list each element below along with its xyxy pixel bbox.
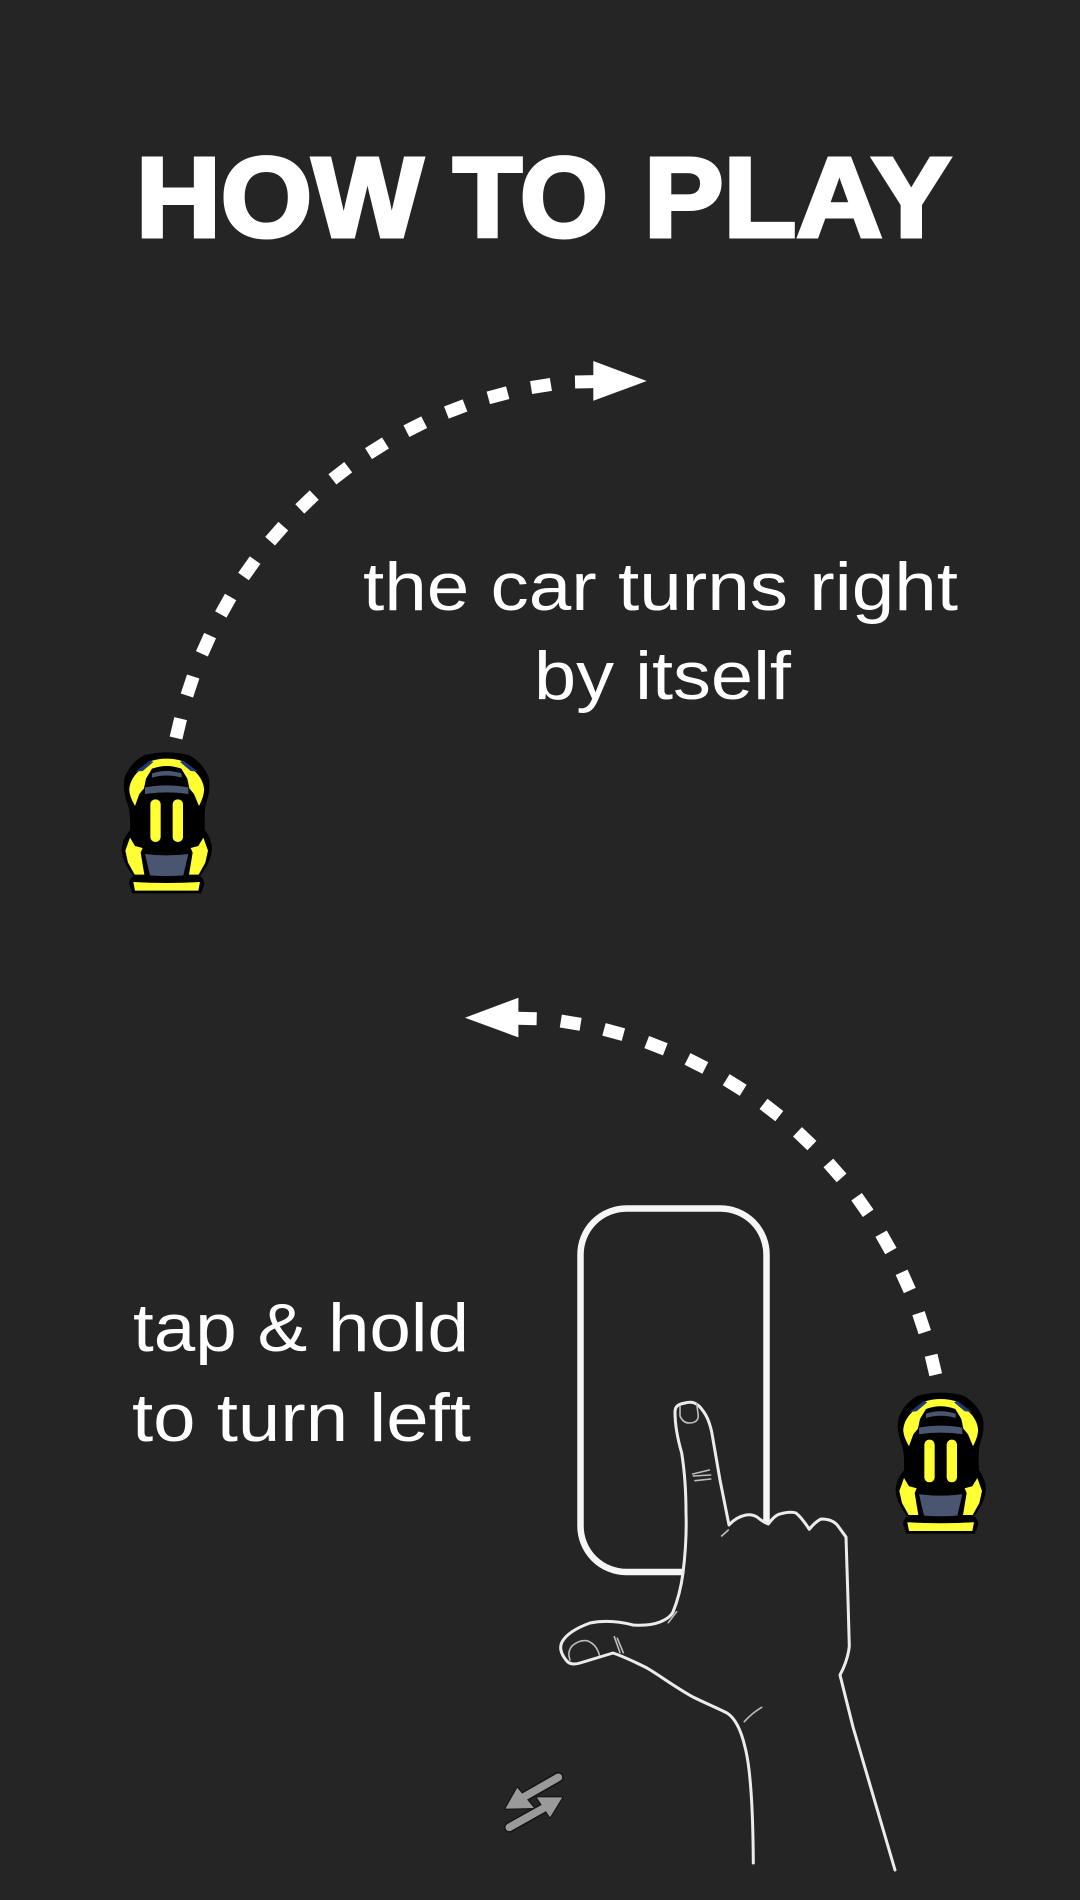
icon: hand pressing the screen xyxy=(561,1402,895,1870)
title: TO xyxy=(453,134,608,260)
title: PLAY xyxy=(644,134,951,260)
car: rear wings and bumper xyxy=(899,1478,982,1531)
car: navy corners xyxy=(909,1401,972,1412)
text: the car turns right by itself: by itself xyxy=(534,638,791,714)
car: yellow stripes xyxy=(150,799,183,842)
hand outline xyxy=(561,1402,895,1870)
title: HOW xyxy=(136,134,423,260)
car: yellow front wing xyxy=(129,759,204,806)
hand details: nails and creases xyxy=(569,1404,762,1722)
car: rear wings and bumper xyxy=(125,838,208,891)
text: the car turns right by itself xyxy=(363,549,958,714)
icon: yellow car, right xyxy=(896,1393,986,1534)
car: navy corners xyxy=(135,761,198,772)
arrow: dashed curve turning right xyxy=(176,361,647,738)
title xyxy=(136,134,951,260)
icon: phone screen outline xyxy=(580,1208,766,1572)
car: windows xyxy=(919,1411,962,1516)
arrow outlines xyxy=(506,1777,562,1827)
text: tap and hold to turn left: to turn left xyxy=(132,1380,471,1456)
text: tap and hold to turn left: tap & hold xyxy=(133,1290,469,1366)
icon: yellow car, left xyxy=(122,752,212,893)
text: the car turns right by itself: the car turns right xyxy=(363,549,958,625)
car: windows xyxy=(145,771,188,876)
car: yellow front wing xyxy=(903,1399,978,1446)
arrow: dashed curve turning left xyxy=(465,998,936,1375)
text: tap and hold to turn left xyxy=(132,1290,471,1456)
car: yellow stripes xyxy=(924,1440,957,1482)
arrow fills xyxy=(506,1777,562,1827)
icon: swap arrows xyxy=(506,1777,562,1827)
